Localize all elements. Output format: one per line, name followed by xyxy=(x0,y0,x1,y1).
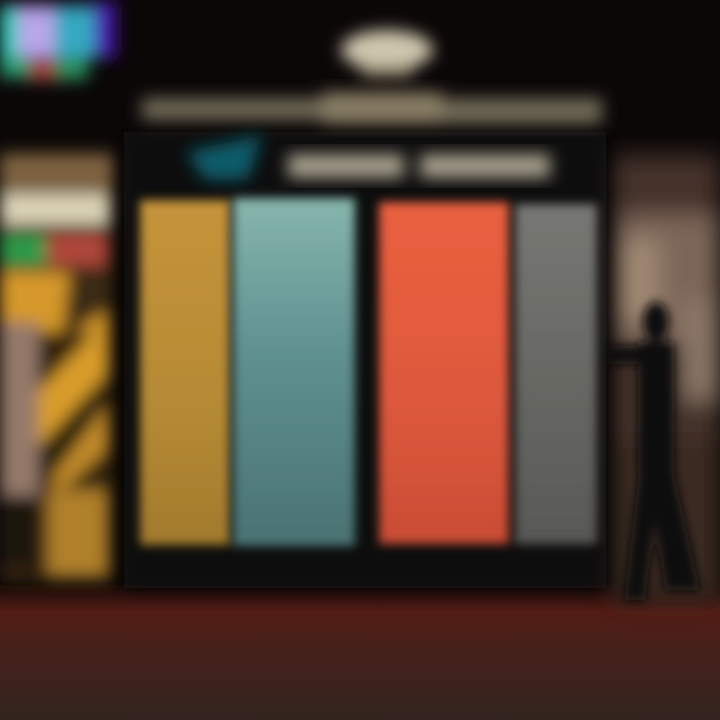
storefront: right xyxy=(612,155,720,600)
panel: grey column xyxy=(515,204,597,544)
floor xyxy=(0,585,720,720)
icon: teal emblem xyxy=(186,135,262,180)
panel: gold column xyxy=(140,200,230,545)
silhouette: person on right xyxy=(606,302,700,600)
panel: red column xyxy=(379,202,509,544)
neon sign: top left xyxy=(0,0,118,80)
heading: title line xyxy=(142,92,602,124)
panel: teal column xyxy=(233,198,355,546)
subtitle xyxy=(288,154,550,178)
display board xyxy=(124,132,606,588)
storefront: left xyxy=(0,152,114,582)
heading: logo mark xyxy=(341,30,433,78)
